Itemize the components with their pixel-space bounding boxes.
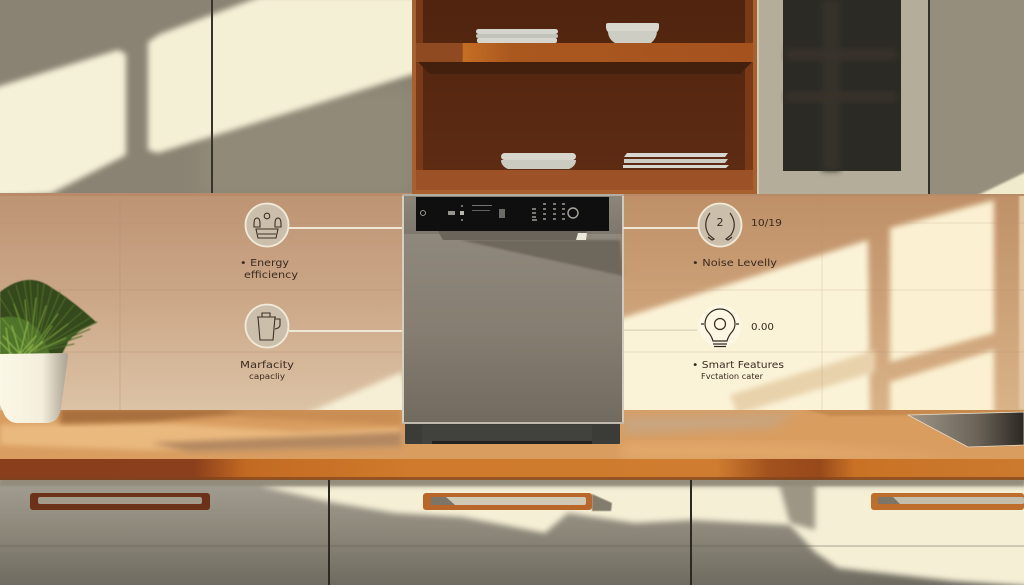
- label: • Smart Features: [692, 360, 784, 371]
- plates lower right: [623, 153, 729, 168]
- drawer handle right: [871, 493, 1024, 510]
- bowls lower left: [501, 153, 576, 169]
- induction hob: [908, 412, 1024, 447]
- value: 10/19: [751, 218, 782, 229]
- dishwasher plinth: [405, 423, 620, 444]
- backsplash right: [610, 195, 1024, 415]
- icon: light bulb: [699, 305, 741, 347]
- label: • Noise Levelly: [692, 258, 777, 269]
- handle shadows: [592, 494, 612, 511]
- dishwasher door: [402, 232, 624, 424]
- plates top left: [476, 29, 558, 43]
- lower cabinets: [0, 479, 1024, 585]
- right cabinet door: [928, 0, 1024, 198]
- upper shelf board: [416, 43, 753, 74]
- dial: [568, 208, 578, 218]
- callout: energy efficiency: [240, 204, 402, 281]
- open wood shelving: [412, 0, 757, 194]
- countertop: [0, 408, 1024, 480]
- backsplash left: [0, 195, 410, 414]
- icon: sound brackets: [698, 204, 742, 246]
- sunlit pane lower right: [890, 350, 994, 415]
- label: • Energy: [240, 258, 289, 269]
- glass cabinet: [757, 0, 928, 194]
- callout: smart features: [623, 305, 784, 381]
- cast shadow on drawer: [778, 480, 815, 530]
- drawer handle middle: [423, 493, 592, 510]
- foliage: [0, 280, 97, 356]
- bowls top right: [606, 23, 659, 43]
- label: Fvctation cater: [701, 372, 764, 381]
- sunlight patch right: [148, 0, 420, 153]
- label: efficiency: [244, 270, 298, 281]
- potted plant: [0, 280, 97, 423]
- sunlit pane upper right: [890, 200, 994, 362]
- upper left cabinets: [0, 0, 420, 198]
- dishwasher: [402, 194, 624, 444]
- callout: noise level: [623, 204, 782, 269]
- drawer handle left: [30, 493, 210, 510]
- callout: capacity: [240, 304, 402, 381]
- icon: eggs over basket: [246, 204, 288, 246]
- icon: sound brackets: 2: [716, 216, 724, 229]
- sunlit pane large: [610, 240, 870, 415]
- sunlight on lower cabinets: [260, 486, 1024, 585]
- countertop front edge: [0, 459, 1024, 480]
- sunlight patch left: [0, 50, 126, 198]
- icon: container: [246, 304, 288, 348]
- glass pane: [783, 0, 901, 171]
- power icon: [420, 210, 426, 216]
- value: 0.00: [751, 322, 774, 333]
- label: [692, 360, 784, 381]
- control panel display: [416, 197, 609, 231]
- label: [240, 258, 298, 281]
- label: Marfacity: [240, 360, 294, 371]
- pot: [0, 353, 68, 423]
- ledge under cabinets: [0, 193, 1024, 196]
- lower shelf board: [416, 170, 753, 190]
- label: capacliy: [249, 372, 285, 381]
- door handle: [438, 231, 587, 240]
- label: [240, 360, 294, 381]
